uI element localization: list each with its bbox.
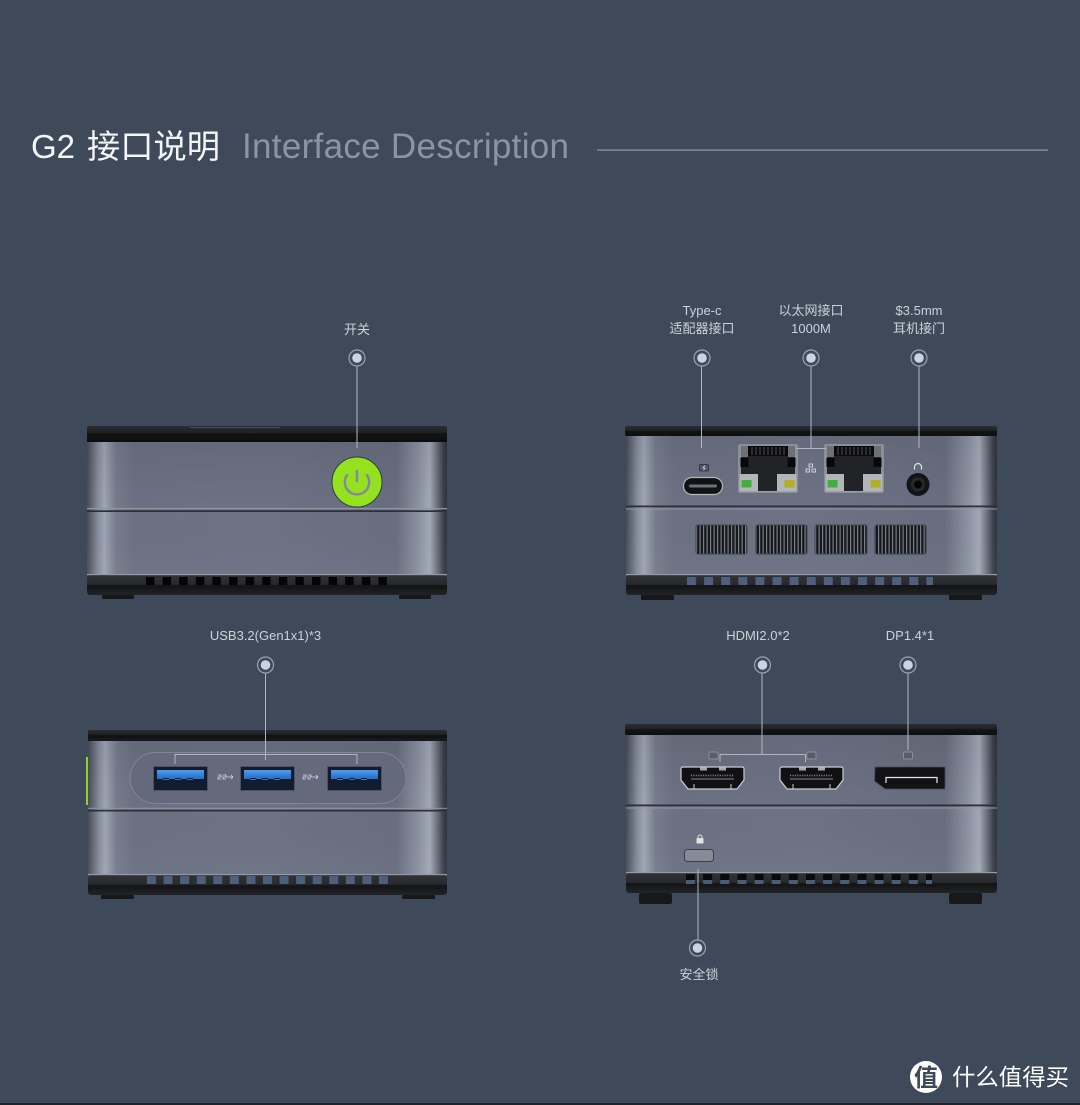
- device body: [625, 426, 997, 600]
- security lock slot: [684, 850, 714, 862]
- watermark: 值: [914, 1065, 938, 1092]
- icon: USB port 1: [153, 766, 208, 791]
- device body: [625, 724, 997, 904]
- label: security lock: 安全锁: [679, 967, 719, 982]
- label: USB: USB3.2(Gen1x1)*3: [210, 628, 321, 643]
- marker and leader line: ethernet: [796, 350, 826, 448]
- label: headphone port: 耳机接门: [893, 321, 945, 336]
- label: adapter port: 适配器接口: [669, 321, 735, 336]
- icon: ethernet port 2: [824, 444, 884, 493]
- label: Type-C: Type-c: [682, 303, 722, 318]
- marker and leader line: HDMI: [720, 657, 806, 762]
- icon: power button: [332, 457, 382, 507]
- icon: ethernet port 1: [738, 444, 798, 493]
- label: 3.5mm: $3.5mm: [896, 303, 942, 318]
- icon: SuperSpeed USB mark 1: [218, 775, 233, 779]
- panel: rear of device with network and power ports: [625, 303, 997, 600]
- icon: headphone jack: [906, 464, 930, 496]
- icon: HDMI port 2: [780, 767, 843, 789]
- marker and leader line: headphone: [911, 350, 927, 448]
- panel: side of device with USB ports: [86, 628, 447, 899]
- title: [31, 127, 1048, 166]
- icon: lock: [696, 835, 704, 844]
- title: Interface Description: [242, 127, 569, 166]
- marker and leader line: power: [349, 350, 365, 448]
- icon: USB port 2: [240, 766, 295, 791]
- panel: rear of device with display outputs: [625, 628, 997, 982]
- marker and leader line: security lock: [690, 869, 706, 956]
- marker and leader line: Type-C: [694, 350, 710, 448]
- icon: SuperSpeed USB mark 2: [303, 775, 318, 779]
- icon: HDMI marks: [709, 752, 912, 759]
- icon: HDMI port 1: [681, 767, 744, 789]
- marker and leader line: DP: [900, 657, 916, 750]
- device body: [87, 426, 447, 599]
- watermark: 什么值得买: [952, 1064, 1069, 1090]
- USB port bezel: [130, 752, 406, 804]
- label: HDMI: HDMI2.0*2: [726, 628, 790, 643]
- vent grilles: [696, 525, 926, 554]
- device body: [86, 730, 447, 899]
- label: power switch: 开关: [344, 322, 370, 337]
- icon: USB-C port: [684, 464, 722, 494]
- icon: DisplayPort: [874, 767, 945, 789]
- label: 1000M: 1000M: [791, 321, 831, 336]
- label: ethernet: 以太网接口: [778, 303, 844, 318]
- label: DP: DP1.4*1: [886, 628, 934, 643]
- marker and leader line: USB: [175, 657, 357, 764]
- title: G2: [31, 128, 75, 165]
- icon: USB port 3: [327, 766, 382, 791]
- panel: front of device with power button: [87, 322, 447, 599]
- title: 接口说明: [87, 128, 220, 165]
- watermark: [910, 1061, 1069, 1093]
- icon: network symbol: [806, 464, 816, 472]
